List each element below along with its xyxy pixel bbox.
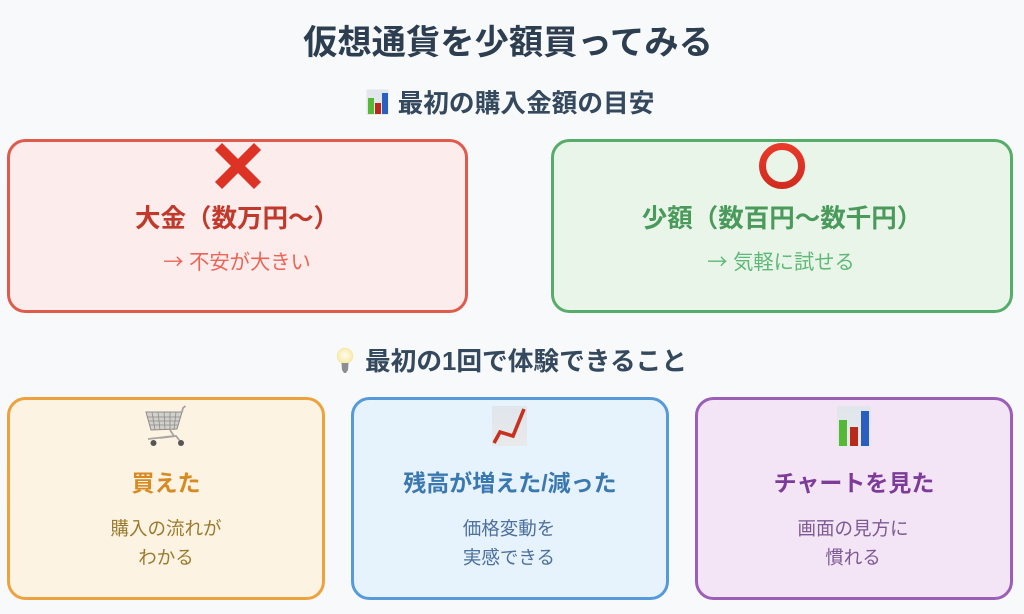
icon: light bulb: [337, 348, 353, 373]
heading text: 最初の1回で体験できること: [365, 347, 687, 376]
panel heading: 大金（数万円〜）: [135, 205, 339, 233]
panel: bought: わかる: [138, 547, 194, 568]
icon: bar chart small: [366, 90, 388, 115]
icon: rising chart: [492, 406, 527, 446]
title: 仮想通貨を少額買ってみる: [303, 24, 713, 62]
panel heading: 残高が増えた/減った: [403, 470, 617, 496]
icon: bar chart: [837, 406, 871, 447]
panel heading: チャートを見た: [774, 470, 934, 496]
icon: circle mark: [762, 146, 802, 186]
panel: viewed chart: [696, 398, 1012, 598]
panel: small amount: [552, 140, 1012, 312]
panel heading: 買えた: [132, 470, 200, 496]
panel note: → 気軽に試せる: [707, 245, 855, 275]
heading: first purchase amount: [366, 89, 654, 118]
panel: balance changed: 実感できる: [463, 547, 555, 568]
icon: shopping cart: [146, 406, 186, 446]
panel note: → 不安が大きい: [163, 245, 311, 275]
heading: what you can experience: [337, 347, 687, 376]
panel heading: 少額（数百円〜数千円）: [642, 205, 922, 233]
panel body: 購入の流れが: [110, 518, 222, 539]
panel body: 画面の見方に: [797, 518, 909, 539]
heading text: 最初の購入金額の目安: [398, 89, 654, 118]
panel: large amount: [8, 140, 466, 312]
panel: viewed chart: 慣れる: [825, 547, 881, 568]
icon: cross mark: [218, 146, 258, 186]
panel: balance changed: [352, 398, 668, 598]
panel body: 価格変動を: [463, 518, 555, 539]
panel: bought: [8, 398, 324, 598]
